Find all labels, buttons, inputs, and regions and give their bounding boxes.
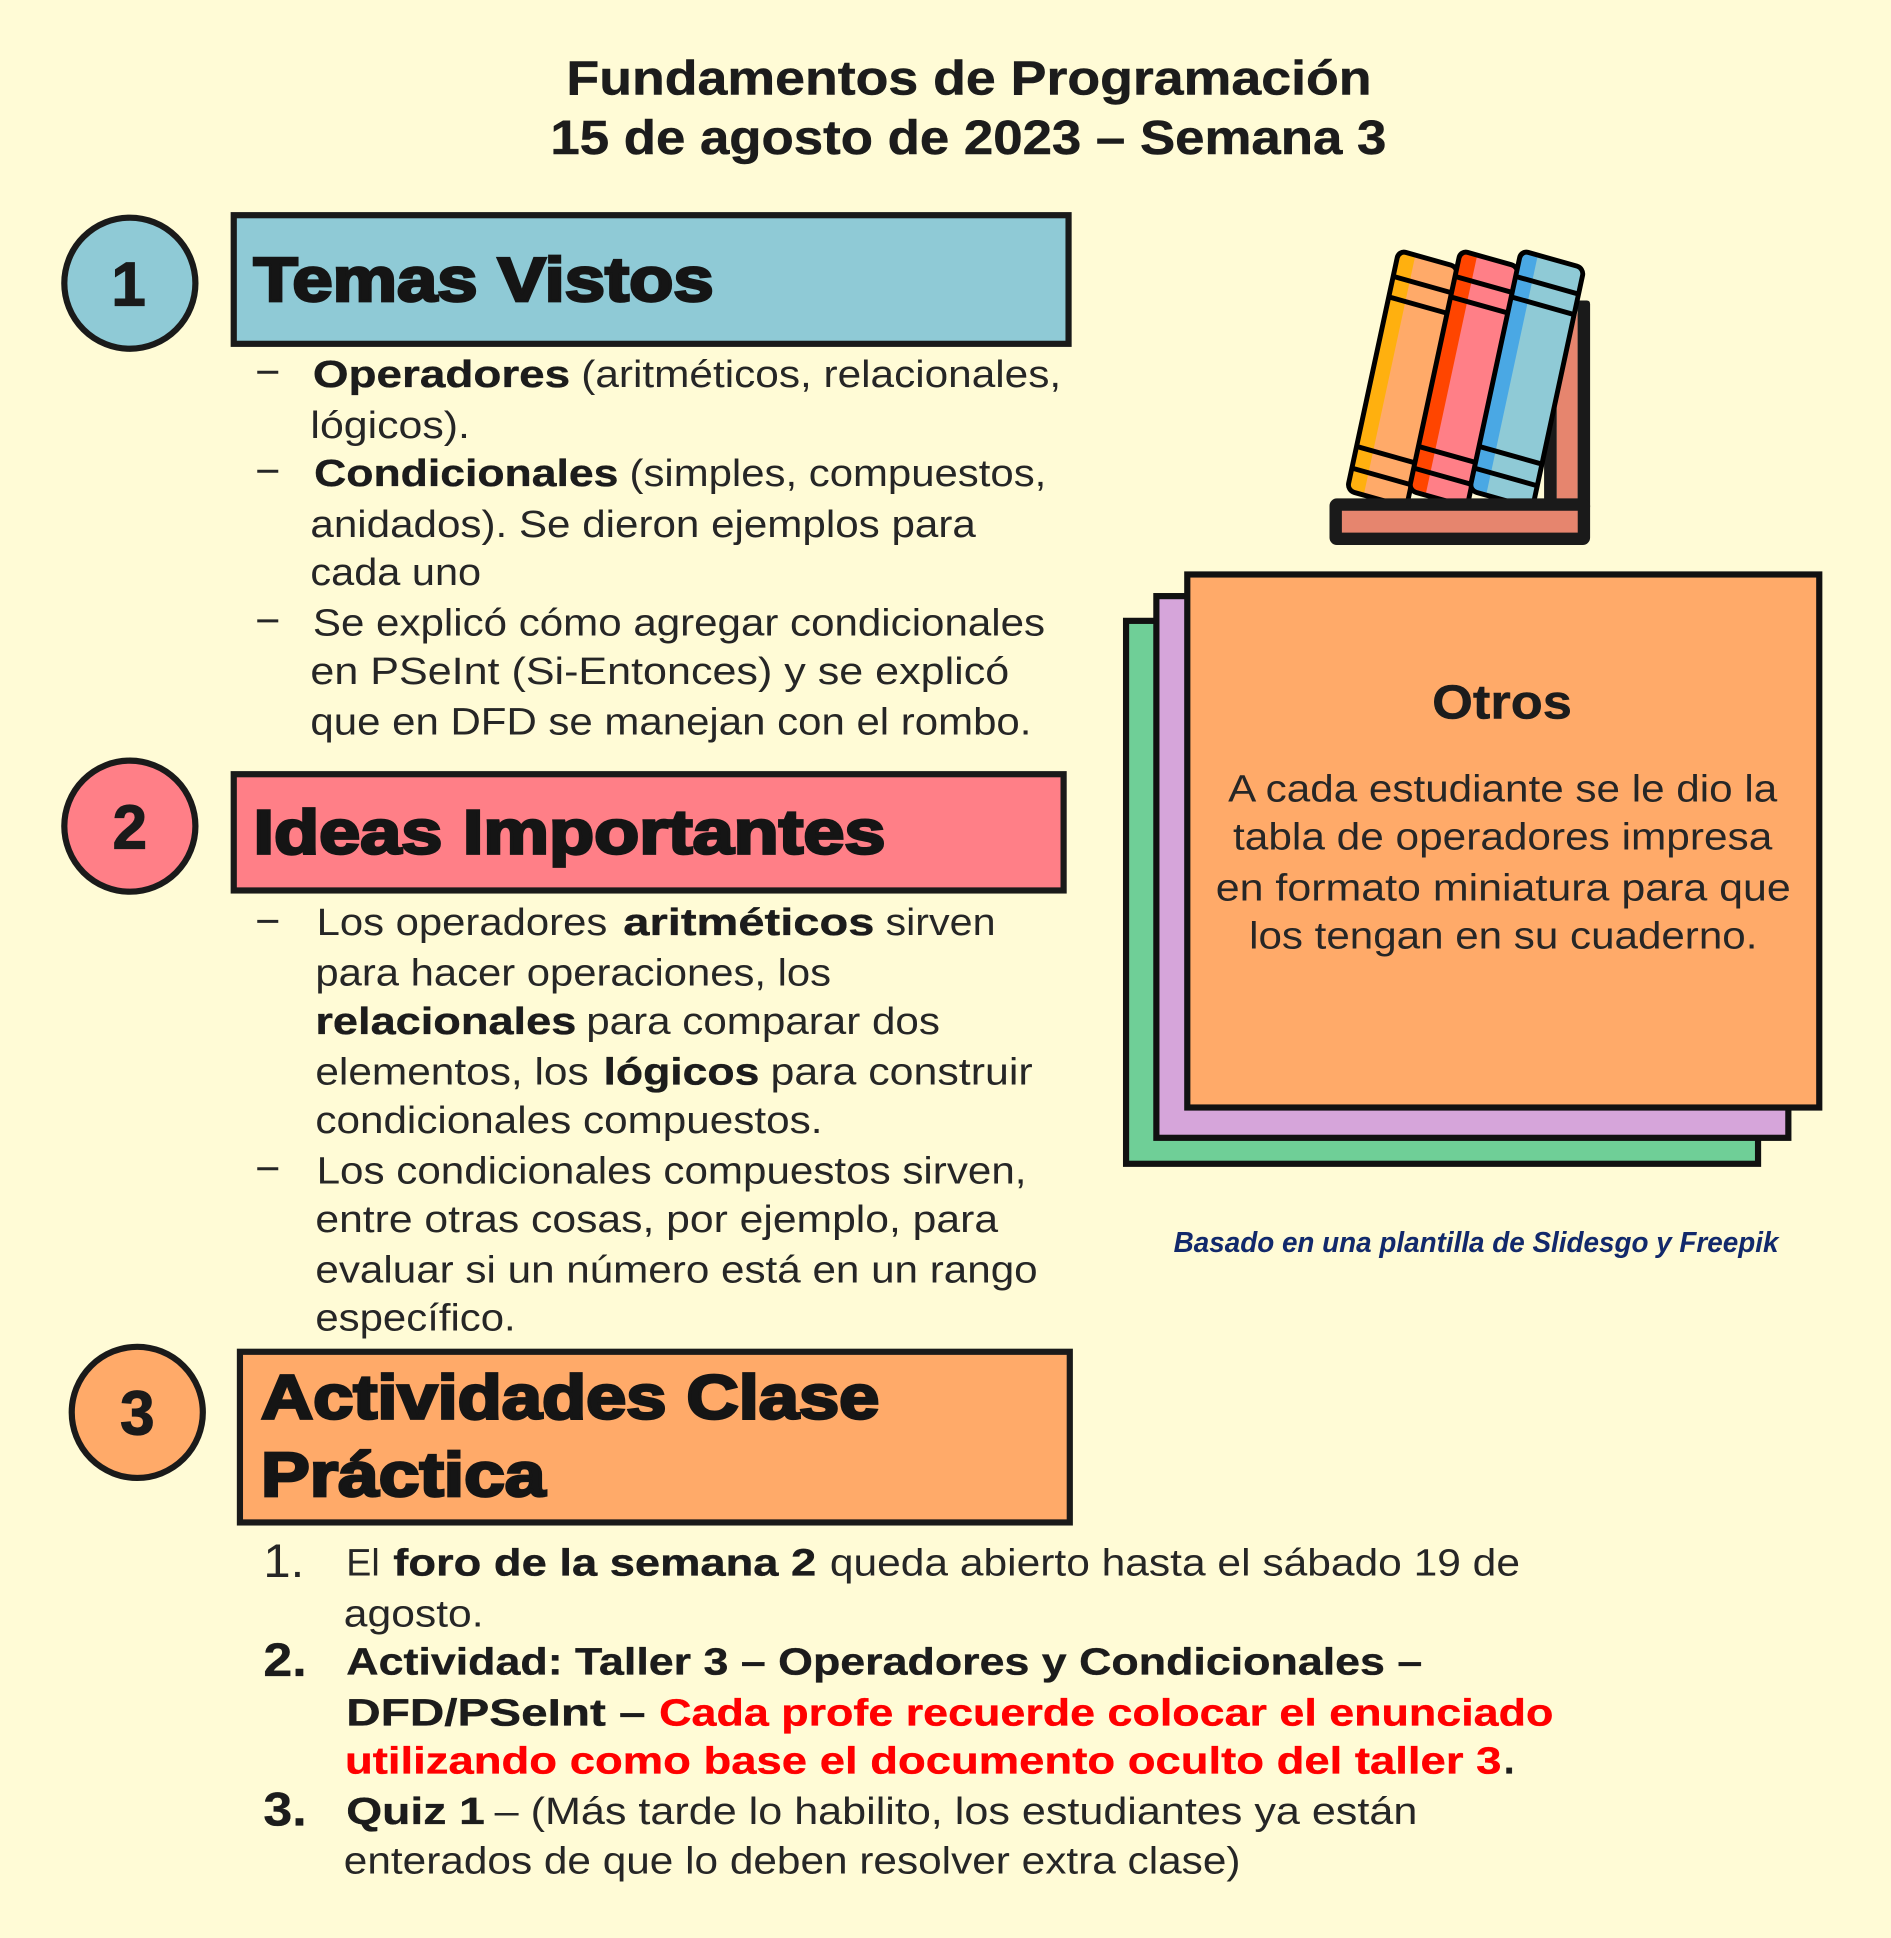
bullet list: ideas importantes: entre otras cosas, por ejemplo, para: [315, 1198, 999, 1241]
bullet list: ideas importantes: condicionales compuestos.: [315, 1099, 822, 1142]
bullet list: ideas importantes: para hacer operaciones, los: [315, 952, 831, 995]
number badge 2: 2: [113, 793, 147, 862]
card: purple: [1156, 596, 1788, 1138]
panel: temas vistos: [64, 215, 1069, 744]
card: orange: [1187, 574, 1819, 1108]
shelf board: [1336, 505, 1584, 539]
bullet list: temas vistos: lógicos).: [310, 404, 470, 447]
numbered list: actividades: agosto.: [344, 1592, 484, 1635]
number badge 3: 3: [120, 1380, 154, 1449]
numbered list: actividades: [263, 1534, 1553, 1883]
text: otros body: en formato miniatura para que: [1216, 866, 1791, 909]
bullet list: ideas importantes: sirven: [886, 901, 996, 944]
heading: temas vistos: Temas Vistos: [254, 246, 714, 315]
bullet list: temas vistos: en PSeInt (Si-Entonces) y se explicó: [310, 650, 1009, 693]
numbered list: actividades: enterados de que lo deben resolver extra clase): [344, 1840, 1240, 1883]
credit note: Basado en una plantilla de Slidesgo y Freepik: [1174, 1227, 1780, 1259]
numbered list: actividades: utilizando como base el documento oculto del taller 3: [345, 1740, 1501, 1783]
number badge 3: [72, 1347, 203, 1478]
bullet list: temas vistos: (aritméticos, relacionales,: [581, 353, 1061, 396]
bullet list: temas vistos: cada uno: [310, 551, 481, 594]
bullet list: temas vistos: anidados). Se dieron ejemplos para: [310, 503, 977, 546]
number badge 2: [64, 761, 195, 892]
numbered list: actividades: 3.: [263, 1782, 307, 1835]
bullet list: ideas importantes: relacionales: [315, 1000, 576, 1043]
numbered list: actividades: Actividad: Taller 3 – Operadores y Condicionales –: [346, 1641, 1422, 1684]
numbered list: actividades: Quiz 1: [346, 1790, 485, 1833]
bullet list: ideas importantes: para construir: [770, 1051, 1033, 1094]
bullet list: ideas importantes: elementos, los: [315, 1051, 589, 1094]
heading: temas vistos: [234, 215, 1069, 344]
card: green: [1126, 621, 1758, 1164]
number badge 1: 1: [111, 250, 146, 319]
bullet list: ideas importantes: para comparar dos: [586, 1000, 940, 1043]
book: blue: [1468, 250, 1585, 508]
bullet list: ideas importantes: [257, 901, 1038, 1340]
text: otros body: tabla de operadores impresa: [1233, 816, 1773, 859]
numbered list: actividades: El: [346, 1542, 380, 1585]
heading: ideas importantes: Ideas Importantes: [254, 798, 886, 867]
shelf bracket: [1544, 301, 1590, 507]
panel: otros stacked cards: [1126, 574, 1819, 1164]
book: pink: [1408, 250, 1520, 507]
numbered list: actividades: .: [1504, 1740, 1515, 1783]
cover below shelf: [1311, 545, 1608, 570]
bullet list: temas vistos: Condicionales: [314, 452, 618, 495]
heading: otros: Otros: [1432, 676, 1572, 730]
numbered list: actividades: – (Más tarde lo habilito, los estudiantes ya están: [495, 1790, 1417, 1833]
numbered list: actividades: queda abierto hasta el sábado 19 de: [830, 1542, 1520, 1585]
panel: actividades clase practica: [72, 1347, 1553, 1883]
title: Fundamentos de Programación: [566, 52, 1372, 106]
bullet list: temas vistos: [257, 353, 1061, 744]
bullet list: temas vistos: que en DFD se manejan con el rombo.: [310, 701, 1031, 744]
bullet list: ideas importantes: lógicos: [604, 1051, 759, 1094]
icon: books on shelf: [1311, 250, 1608, 570]
numbered list: actividades: foro de la semana 2: [393, 1542, 816, 1585]
heading: ideas importantes: [234, 774, 1064, 890]
numbered list: actividades: 2.: [263, 1633, 307, 1686]
heading: actividades clase practica: [240, 1352, 1070, 1522]
numbered list: actividades: 1.: [263, 1534, 304, 1587]
heading: actividades clase practica: Actividades Clase: [261, 1364, 879, 1433]
bullet list: ideas importantes: Los operadores: [317, 901, 607, 944]
text: otros body: [1216, 767, 1791, 958]
panel: ideas importantes: [64, 761, 1064, 1340]
text: otros body: A cada estudiante se le dio la: [1228, 767, 1778, 810]
title: [550, 52, 1386, 165]
numbered list: actividades: Cada profe recuerde colocar el enunciado: [659, 1691, 1553, 1734]
bullet list: ideas importantes: evaluar si un número está en un rango: [315, 1249, 1038, 1292]
heading: actividades clase practica: Práctica: [261, 1441, 546, 1510]
book: orange: [1346, 250, 1459, 507]
bullet list: ideas importantes: Los condicionales compuestos sirven,: [317, 1150, 1027, 1193]
bullet list: temas vistos: Operadores: [313, 353, 570, 396]
bullet list: ideas importantes: específico.: [315, 1297, 516, 1340]
bullet list: temas vistos: (simples, compuestos,: [630, 452, 1046, 495]
numbered list: actividades: DFD/PSeInt –: [346, 1691, 646, 1734]
title: 15 de agosto de 2023 – Semana 3: [550, 111, 1386, 165]
bullet list: temas vistos: Se explicó cómo agregar condicionales: [313, 602, 1045, 645]
number badge 1: [64, 218, 195, 349]
text: otros body: los tengan en su cuaderno.: [1249, 915, 1757, 958]
bullet list: ideas importantes: aritméticos: [623, 901, 874, 944]
